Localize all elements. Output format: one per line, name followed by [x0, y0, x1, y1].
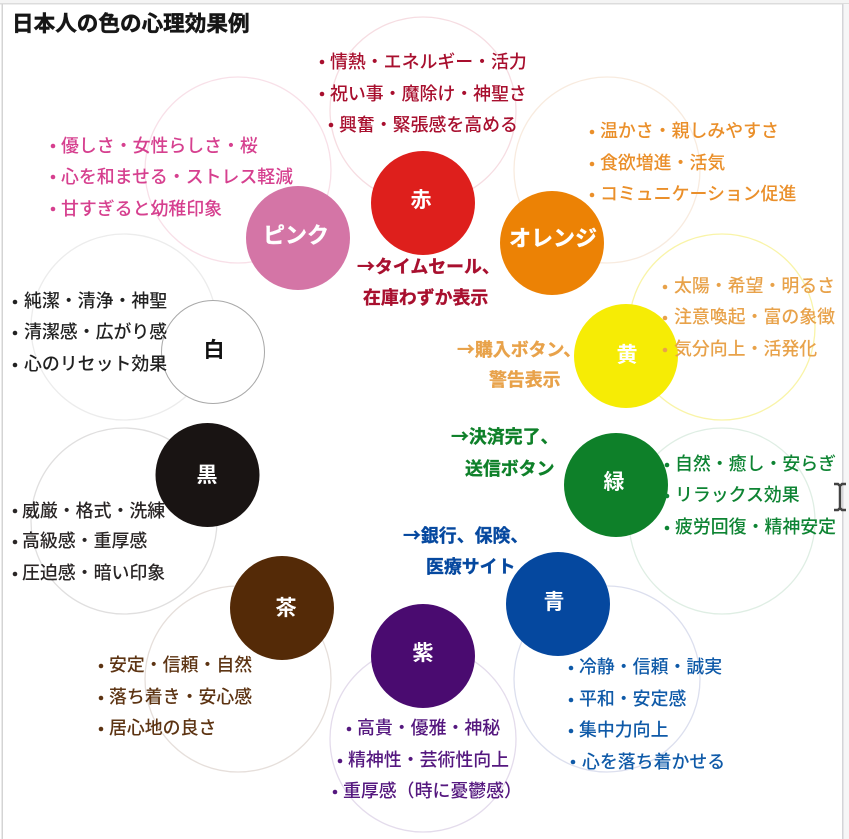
- panel: yellow effects: 注意喚起・富の象徴: [674, 307, 835, 327]
- panel: white effects: 清潔感・広がり感: [24, 321, 167, 342]
- callout: yellow usage: [457, 336, 581, 390]
- color circle: purple: [371, 604, 475, 708]
- panel: green effects: 疲労回復・精神安定: [675, 517, 836, 537]
- outer ring: purple: [330, 646, 516, 832]
- panel: blue effects: 平和・安定感: [579, 689, 686, 709]
- outer ring: blue: [514, 586, 700, 772]
- panel: orange effects: [590, 121, 797, 204]
- panel: yellow effects: 気分向上・活発化: [674, 339, 817, 359]
- icon: text cursor: [834, 484, 846, 510]
- panel: blue effects: 冷静・信頼・誠実: [579, 657, 722, 677]
- callout: red usage: →タイムセール、: [357, 253, 500, 279]
- color circle: red: 赤: [410, 189, 432, 212]
- color circle: purple: 紫: [412, 642, 434, 665]
- color circle: yellow: 黄: [616, 344, 638, 367]
- panel: yellow effects: 太陽・希望・明るさ: [674, 276, 835, 296]
- panel: red effects: 情熱・エネルギー・活力: [330, 52, 527, 72]
- color circle: blue: [506, 552, 610, 656]
- panel: black effects: 高級感・重厚感: [22, 531, 147, 551]
- outer ring: green: [629, 428, 815, 614]
- outer ring: brown: [145, 586, 331, 772]
- panel: red effects: 興奮・緊張感を高める: [339, 115, 518, 135]
- panel: pink effects: [51, 136, 293, 219]
- panel: yellow effects: [663, 276, 835, 359]
- title: 日本人の色の心理効果例: [12, 11, 250, 36]
- panel: green effects: [665, 453, 836, 537]
- outer ring: yellow: [629, 234, 815, 420]
- color circle: black: 黒: [196, 464, 218, 487]
- panel: black effects: 威厳・格式・洗練: [22, 501, 165, 521]
- color circle: green: 緑: [604, 471, 624, 494]
- color circle: red: [371, 151, 475, 255]
- color circle: pink: [246, 186, 350, 290]
- color circle: white: 白: [204, 339, 224, 362]
- callout: red usage: 在庫わずか表示: [363, 288, 488, 308]
- callout: blue usage: →銀行、保険、: [403, 522, 528, 548]
- panel: white effects: 心のリセット効果: [24, 354, 167, 374]
- callout: yellow usage: 警告表示: [489, 370, 561, 390]
- panel: pink effects: 心を和ませる・ストレス軽減: [61, 167, 293, 187]
- color circle: green: [564, 433, 668, 537]
- color circle: blue: 青: [544, 591, 564, 614]
- panel: purple effects: 高貴・優雅・神秘: [357, 718, 500, 738]
- color circle: orange: [500, 191, 604, 295]
- panel: red effects: [320, 52, 527, 135]
- panel: purple effects: 重厚感（時に憂鬱感）: [343, 781, 522, 801]
- panel: purple effects: 精神性・芸術性向上: [348, 750, 509, 770]
- panel: white effects: [13, 291, 167, 374]
- color circle: brown: 茶: [276, 597, 296, 620]
- callout: green usage: 送信ボタン: [465, 459, 554, 479]
- callout: green usage: [451, 423, 558, 479]
- outer ring: white: [31, 234, 217, 420]
- callout: red usage: [357, 253, 500, 308]
- panel: pink effects: 優しさ・女性らしさ・桜: [61, 136, 258, 156]
- panel: blue effects: 集中力向上: [579, 720, 669, 740]
- color circle: orange: オレンジ: [509, 226, 597, 251]
- panel: pink effects: 甘すぎると幼稚印象: [61, 199, 222, 219]
- outer ring: black: [31, 428, 217, 614]
- panel: black effects: [13, 501, 165, 583]
- panel: green effects: 自然・癒し・安らぎ: [675, 453, 836, 474]
- outer ring: pink: [145, 77, 331, 263]
- panel: orange effects: 食欲増進・活気: [600, 153, 725, 173]
- panel: brown effects: 安定・信頼・自然: [109, 654, 252, 675]
- callout: yellow usage: →購入ボタン、: [457, 336, 581, 362]
- panel: brown effects: 居心地の良さ: [109, 718, 216, 738]
- color circle: white: [162, 300, 264, 404]
- panel: brown effects: [99, 654, 252, 738]
- panel: orange effects: 温かさ・親しみやすさ: [600, 121, 779, 141]
- color circle: yellow: [574, 304, 678, 408]
- panel: black effects: 圧迫感・暗い印象: [22, 563, 165, 583]
- panel: white effects: 純潔・清浄・神聖: [24, 291, 167, 311]
- panel: red effects: 祝い事・魔除け・神聖さ: [330, 84, 527, 104]
- outer ring: red: [330, 17, 516, 203]
- color circle: black: [156, 423, 260, 527]
- outer ring: orange: [514, 77, 700, 263]
- color circle: pink: ピンク: [263, 223, 329, 248]
- panel: brown effects: 落ち着き・安心感: [109, 687, 252, 707]
- callout: blue usage: 医療サイト: [426, 557, 515, 577]
- color circle: brown: [230, 556, 334, 660]
- panel: blue effects: 心を落ち着かせる: [582, 752, 725, 772]
- panel: green effects: リラックス効果: [675, 485, 800, 505]
- panel: orange effects: コミュニケーション促進: [600, 184, 797, 204]
- callout: blue usage: [403, 522, 528, 577]
- panel: blue effects: [569, 657, 725, 772]
- panel: purple effects: [333, 718, 522, 801]
- callout: green usage: →決済完了、: [451, 423, 558, 449]
